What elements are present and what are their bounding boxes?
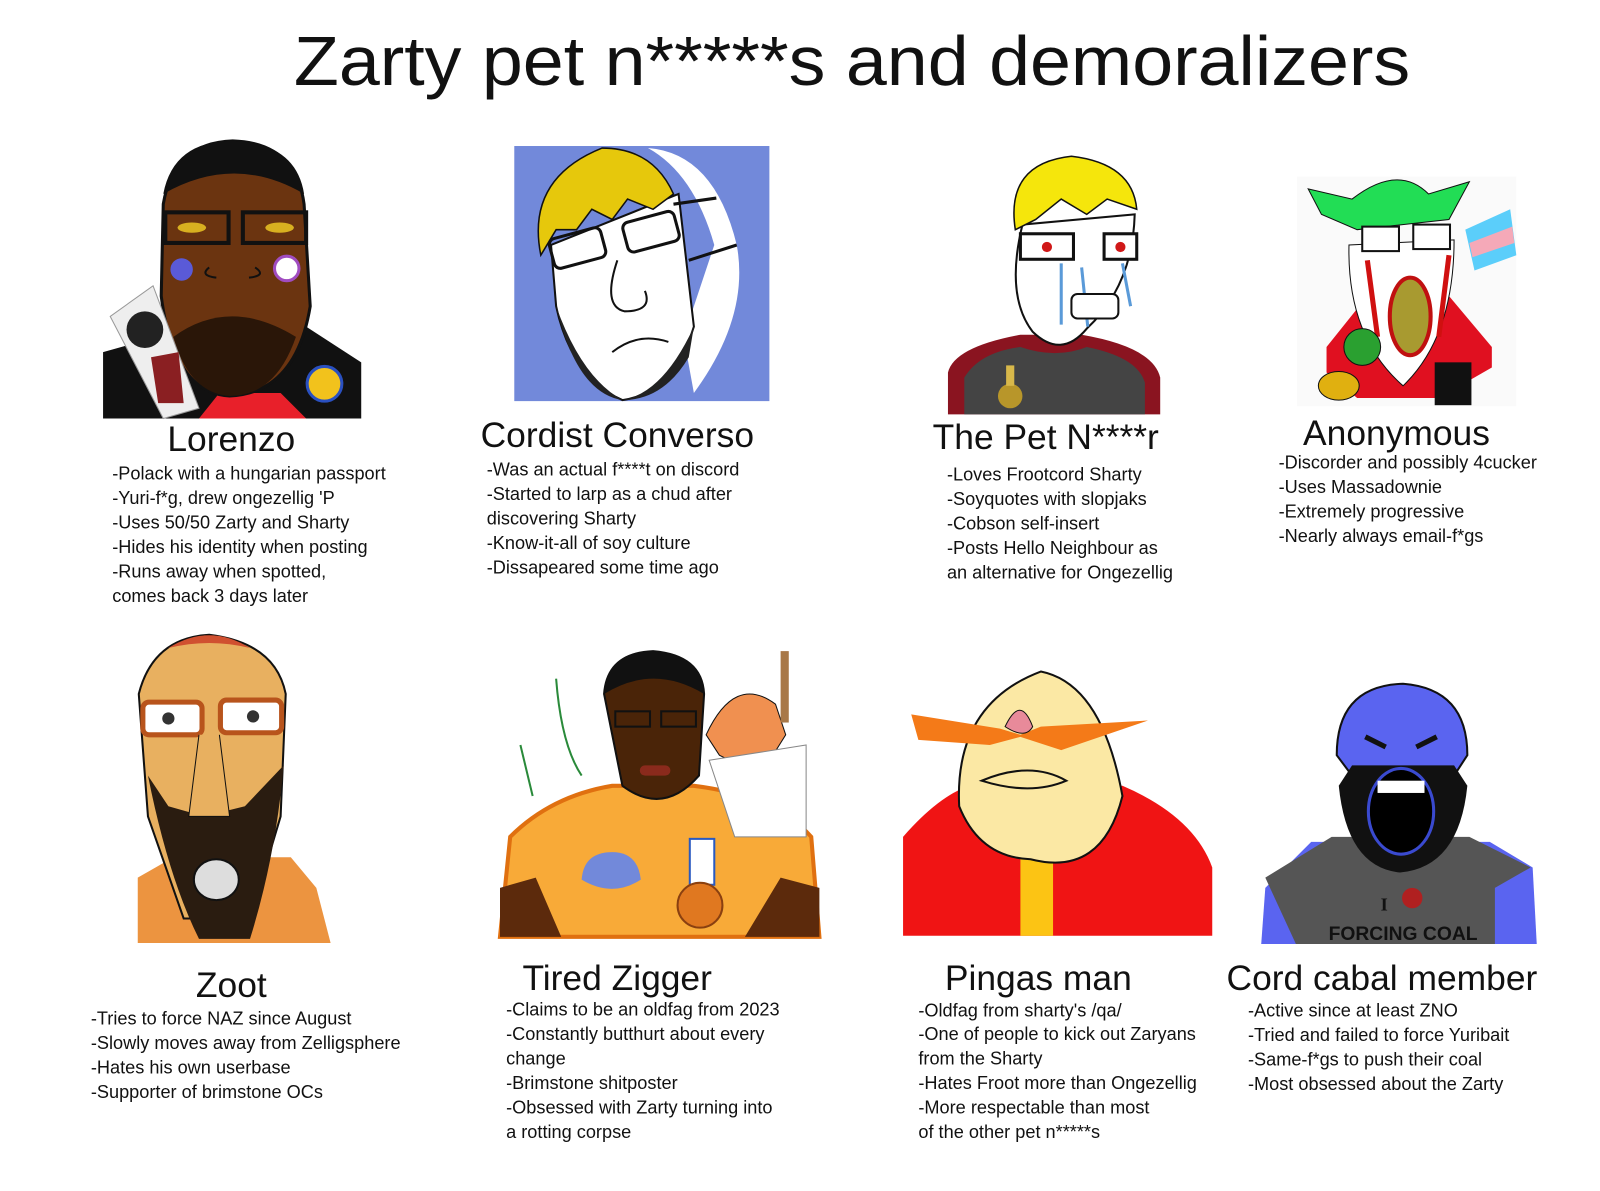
text: The Pet notes: -Soyquotes with slopjaks [947, 489, 1147, 509]
text: Tired Zigger notes: -Constantly butthurt about every [506, 1024, 765, 1044]
heading: Cordist Converso: Cordist Converso [481, 415, 754, 455]
text: Cordist Converso notes: -Was an actual f****t on discord [487, 460, 739, 480]
text: Lorenzo notes: -Polack with a hungarian passport [112, 464, 386, 484]
text: Lorenzo notes [112, 464, 386, 606]
panel: Zoot [91, 635, 401, 1102]
text: Lorenzo notes: -Uses 50/50 Zarty and Sharty [112, 513, 350, 533]
text: The Pet notes: -Cobson self-insert [947, 514, 1099, 534]
panel: Pingas man [903, 672, 1212, 1142]
portrait: Cord cabal member [1261, 684, 1537, 945]
text: Tired Zigger notes: change [506, 1048, 566, 1068]
portrait: Zoot [138, 635, 331, 943]
panel: Lorenzo [103, 141, 386, 606]
text: Cord cabal member notes: -Most obsessed about the Zarty [1248, 1074, 1504, 1094]
text: Cordist Converso notes: -Started to larp as a chud after [487, 484, 732, 504]
panel: Cordist Converso [481, 146, 769, 578]
text: Tired Zigger notes: -Brimstone shitposter [506, 1073, 678, 1093]
text: The Pet notes: -Loves Frootcord Sharty [947, 465, 1143, 485]
heading: Lorenzo: Lorenzo [167, 419, 295, 459]
text: Zoot notes: -Supporter of brimstone OCs [91, 1082, 323, 1102]
heading: Zoot: Zoot [196, 965, 267, 1005]
heading: Tired Zigger: Tired Zigger [522, 958, 712, 998]
text: Cordist Converso notes [487, 460, 739, 578]
text: Pingas man notes: -More respectable than most [918, 1097, 1149, 1117]
panel: The Pet [933, 156, 1173, 583]
panel: Anonymous [1279, 177, 1537, 546]
text: Tired Zigger notes: -Obsessed with Zarty turning into [506, 1097, 773, 1117]
text: Cordist Converso notes: discovering Sharty [487, 509, 637, 529]
portrait: Cord cabal member: FORCING COAL [1329, 923, 1478, 945]
text: Pingas man notes: -Oldfag from sharty's /qa/ [918, 1000, 1123, 1020]
portrait: Pingas man [903, 672, 1212, 936]
portrait: Lorenzo [103, 141, 361, 418]
text: Cordist Converso notes: -Dissapeared some time ago [487, 558, 719, 578]
portrait: The Pet [948, 156, 1160, 414]
text: Tired Zigger notes: a rotting corpse [506, 1122, 631, 1142]
heading: Cord cabal member: Cord cabal member [1227, 958, 1538, 998]
text: Lorenzo notes: -Yuri-f*g, drew ongezellig 'P [112, 488, 335, 508]
text: Zoot notes: -Slowly moves away from Zelligsphere [91, 1033, 401, 1053]
portrait: Cord cabal member: I [1381, 894, 1388, 914]
text: Zoot notes: -Hates his own userbase [91, 1058, 291, 1078]
text: Tired Zigger notes: -Claims to be an oldfag from 2023 [506, 999, 780, 1019]
text: The Pet notes: an alternative for Ongezellig [947, 563, 1173, 583]
text: The Pet notes [947, 465, 1173, 583]
text: Zoot notes: -Tries to force NAZ since August [91, 1009, 351, 1029]
text: Pingas man notes: -One of people to kick out Zaryans [918, 1024, 1196, 1044]
heading: Pingas man: Pingas man [945, 958, 1132, 998]
text: Cord cabal member notes: -Tried and failed to force Yuribait [1248, 1025, 1509, 1045]
text: Tired Zigger notes [506, 999, 780, 1142]
panel: Tired Zigger [500, 651, 819, 1142]
portrait: Cordist Converso [514, 146, 769, 401]
portrait: Tired Zigger [500, 651, 819, 937]
heading: Anonymous: Anonymous [1303, 413, 1490, 453]
text: Lorenzo notes: comes back 3 days later [112, 586, 308, 606]
text: The Pet notes: -Posts Hello Neighbour as [947, 538, 1158, 558]
text: Pingas man notes: of the other pet n*****s [918, 1122, 1100, 1142]
text: Cord cabal member notes [1248, 1000, 1509, 1094]
text: Pingas man notes [918, 1000, 1197, 1142]
heading: The Pet: The Pet N****r [933, 417, 1159, 457]
text: Anonymous notes: -Discorder and possibly 4cucker [1279, 452, 1537, 472]
text: Anonymous notes: -Nearly always email-f*gs [1279, 526, 1483, 546]
title: Zarty pet n*****s and demoralizers [294, 22, 1410, 100]
text: Zoot notes [91, 1009, 401, 1102]
text: Anonymous notes [1279, 452, 1537, 546]
panel: Cord cabal member [1227, 684, 1538, 1094]
text: Cord cabal member notes: -Active since at least ZNO [1248, 1000, 1458, 1020]
text: Anonymous notes: -Uses Massadownie [1279, 477, 1442, 497]
portrait: Anonymous [1297, 177, 1516, 406]
text: Anonymous notes: -Extremely progressive [1279, 501, 1464, 521]
text: Cord cabal member notes: -Same-f*gs to push their coal [1248, 1049, 1482, 1069]
text: Cordist Converso notes: -Know-it-all of soy culture [487, 533, 691, 553]
text: Pingas man notes: from the Sharty [918, 1048, 1043, 1068]
text: Lorenzo notes: -Hides his identity when posting [112, 537, 368, 557]
text: Lorenzo notes: -Runs away when spotted, [112, 562, 326, 582]
text: Pingas man notes: -Hates Froot more than Ongezellig [918, 1073, 1197, 1093]
